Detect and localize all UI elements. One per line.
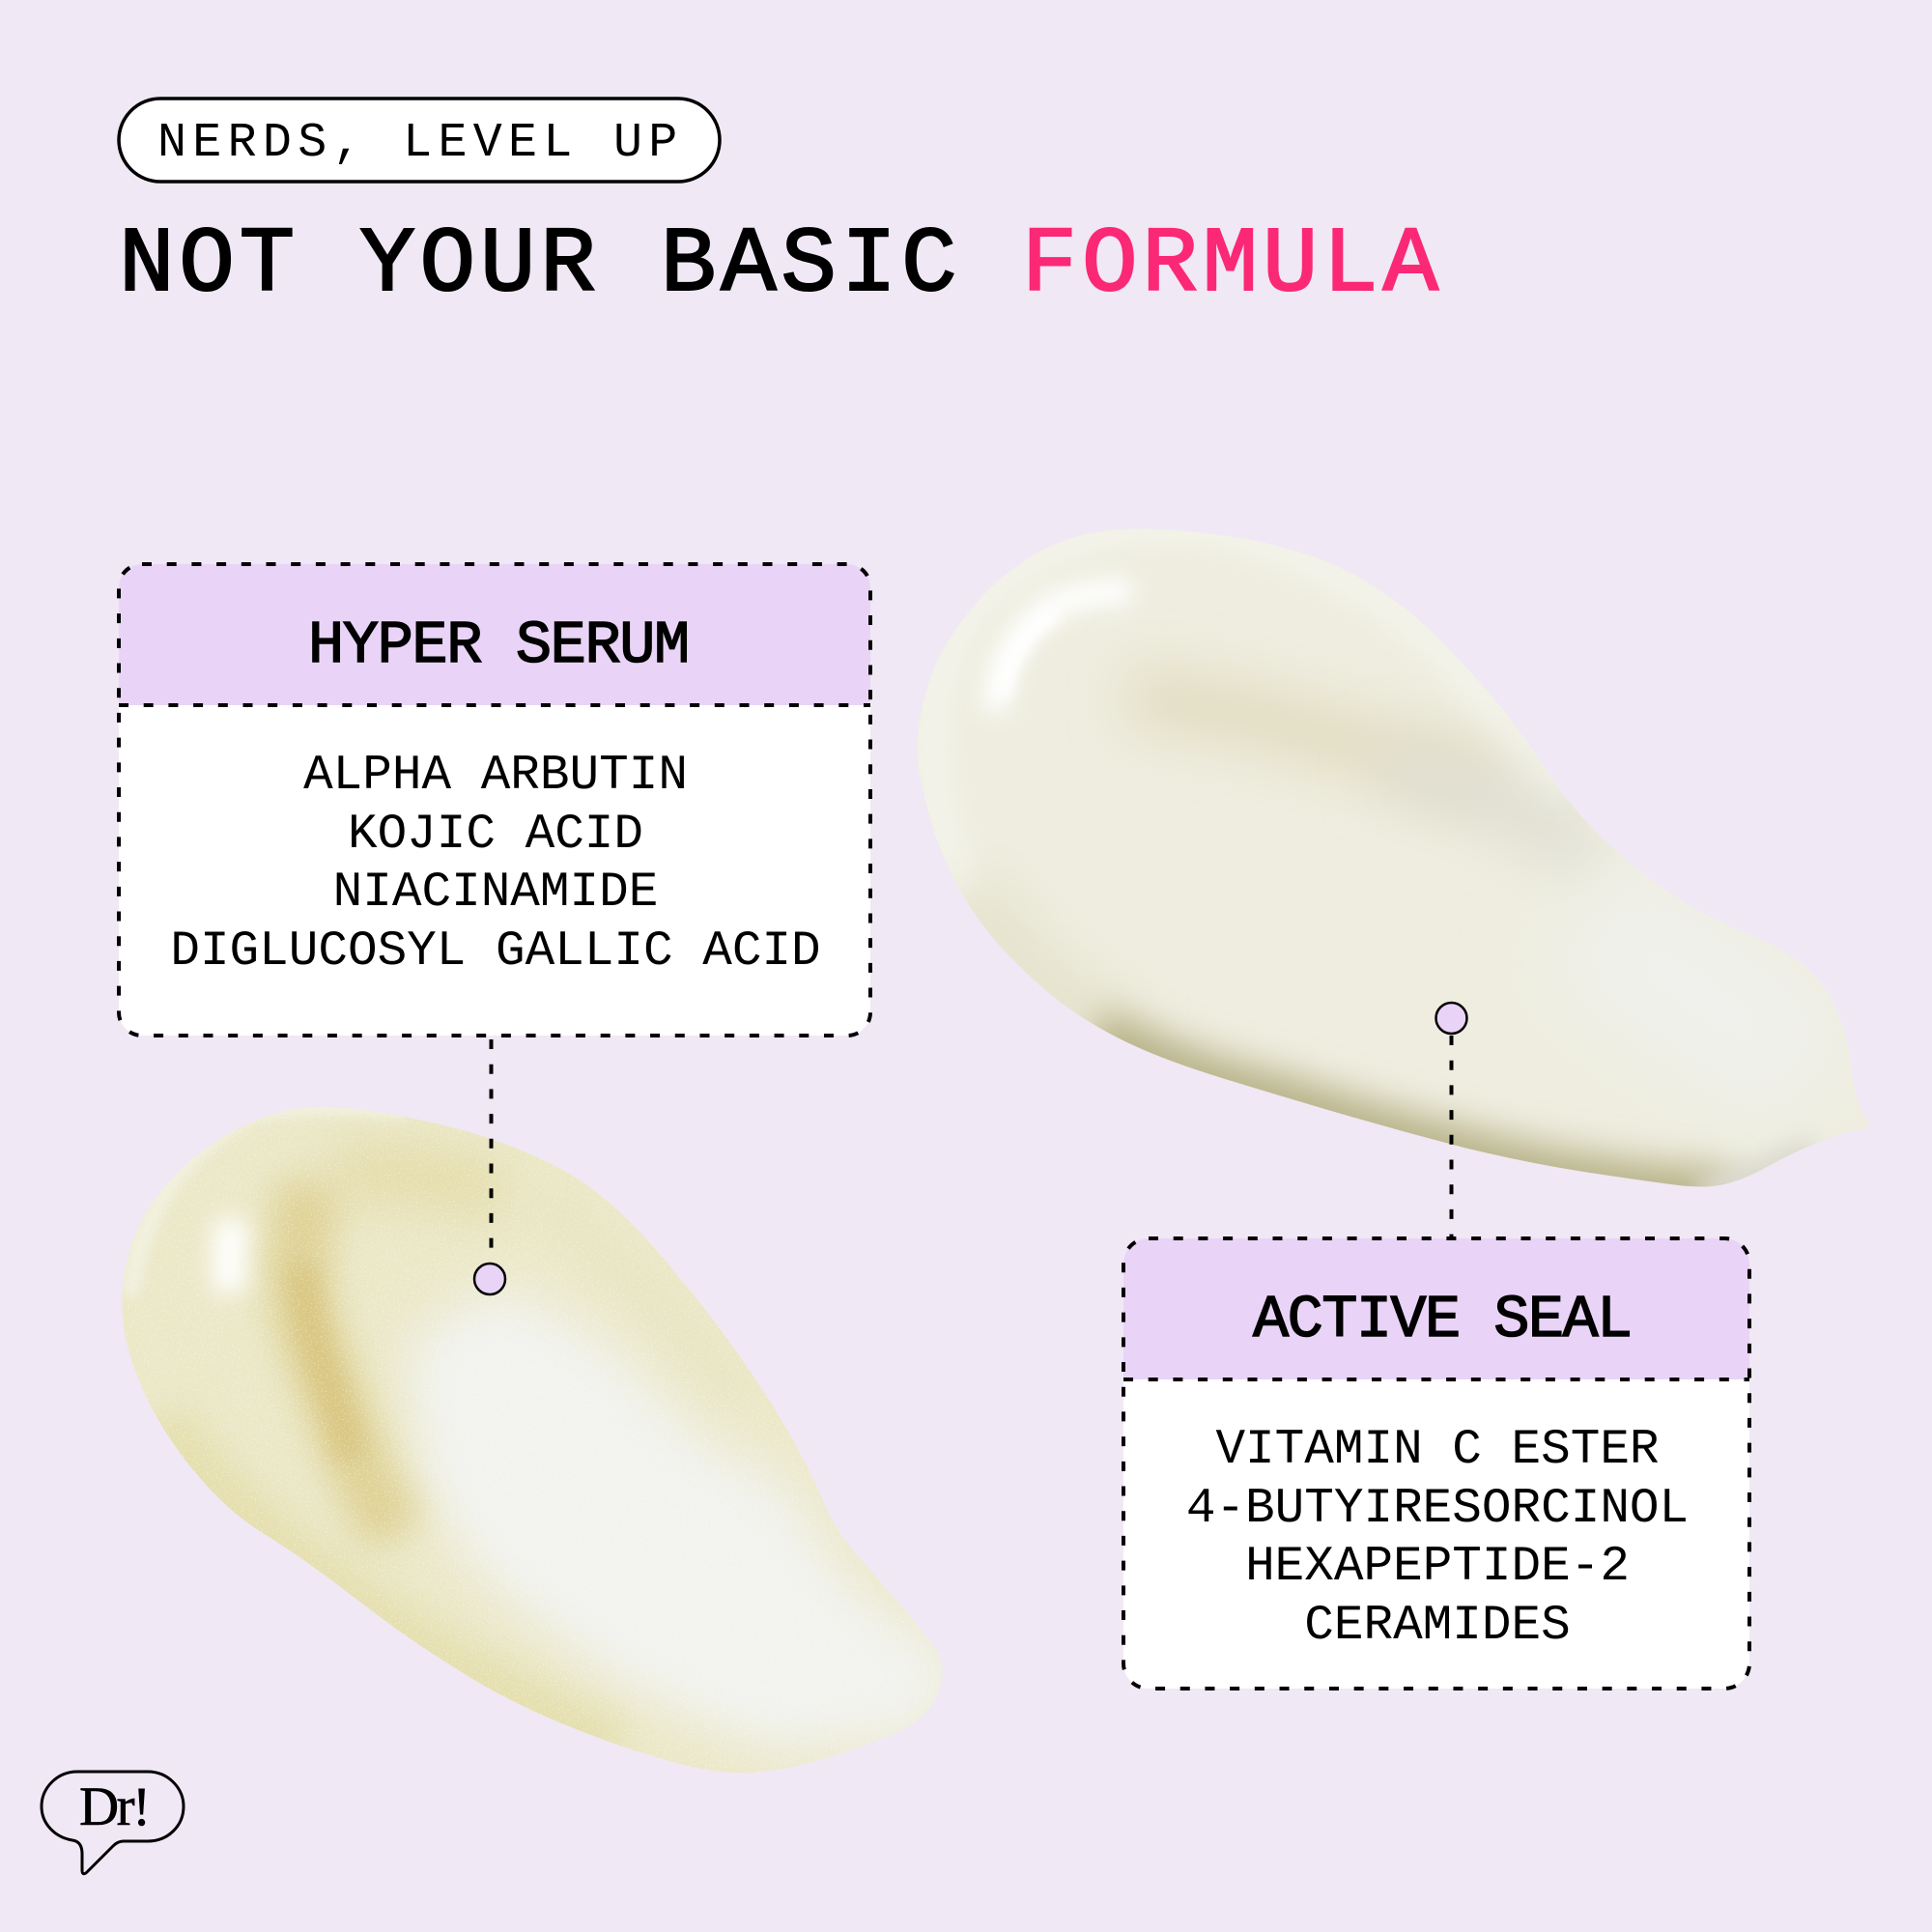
panel header: hyper serum [119, 564, 870, 705]
tag pill: nerds, level up: NERDS, LEVEL UP [157, 116, 684, 171]
panel: active seal [1123, 1238, 1749, 1689]
logo: Dr! speech bubble: Dr! [79, 1776, 149, 1837]
cream swatch: active seal [898, 512, 1884, 1208]
ingredient list: hyper serum: NIACINAMIDE [333, 866, 658, 921]
ingredient list: hyper serum: DIGLUCOSYL GALLIC ACID [170, 924, 821, 980]
logo: Dr! speech bubble [42, 1772, 184, 1874]
connector: hyper serum to swatch [474, 1039, 505, 1294]
ingredient list: hyper serum: KOJIC ACID [348, 808, 643, 863]
cream swatch: hyper serum [106, 1092, 976, 1787]
title: NOT YOUR BASIC FORMULA [119, 213, 1443, 318]
connector: active seal to swatch [1435, 1003, 1466, 1238]
panel: hyper serum [119, 564, 870, 1036]
ingredient list: hyper serum [170, 749, 821, 980]
ingredient list: active seal: HEXAPEPTIDE-2 [1245, 1540, 1630, 1595]
ingredient list: active seal: VITAMIN C ESTER [1215, 1423, 1660, 1478]
tag pill: nerds, level up [119, 99, 720, 182]
ingredient list: active seal: 4-BUTYIRESORCINOL [1186, 1482, 1689, 1537]
heading: active seal: ACTIVE SEAL [1253, 1286, 1632, 1354]
ingredient list: active seal: CERAMIDES [1304, 1599, 1571, 1654]
ingredient list: hyper serum: ALPHA ARBUTIN [303, 749, 688, 804]
heading: hyper serum: HYPER SERUM [308, 611, 689, 680]
panel header: active seal [1123, 1238, 1749, 1379]
ingredient list: active seal [1186, 1423, 1689, 1654]
